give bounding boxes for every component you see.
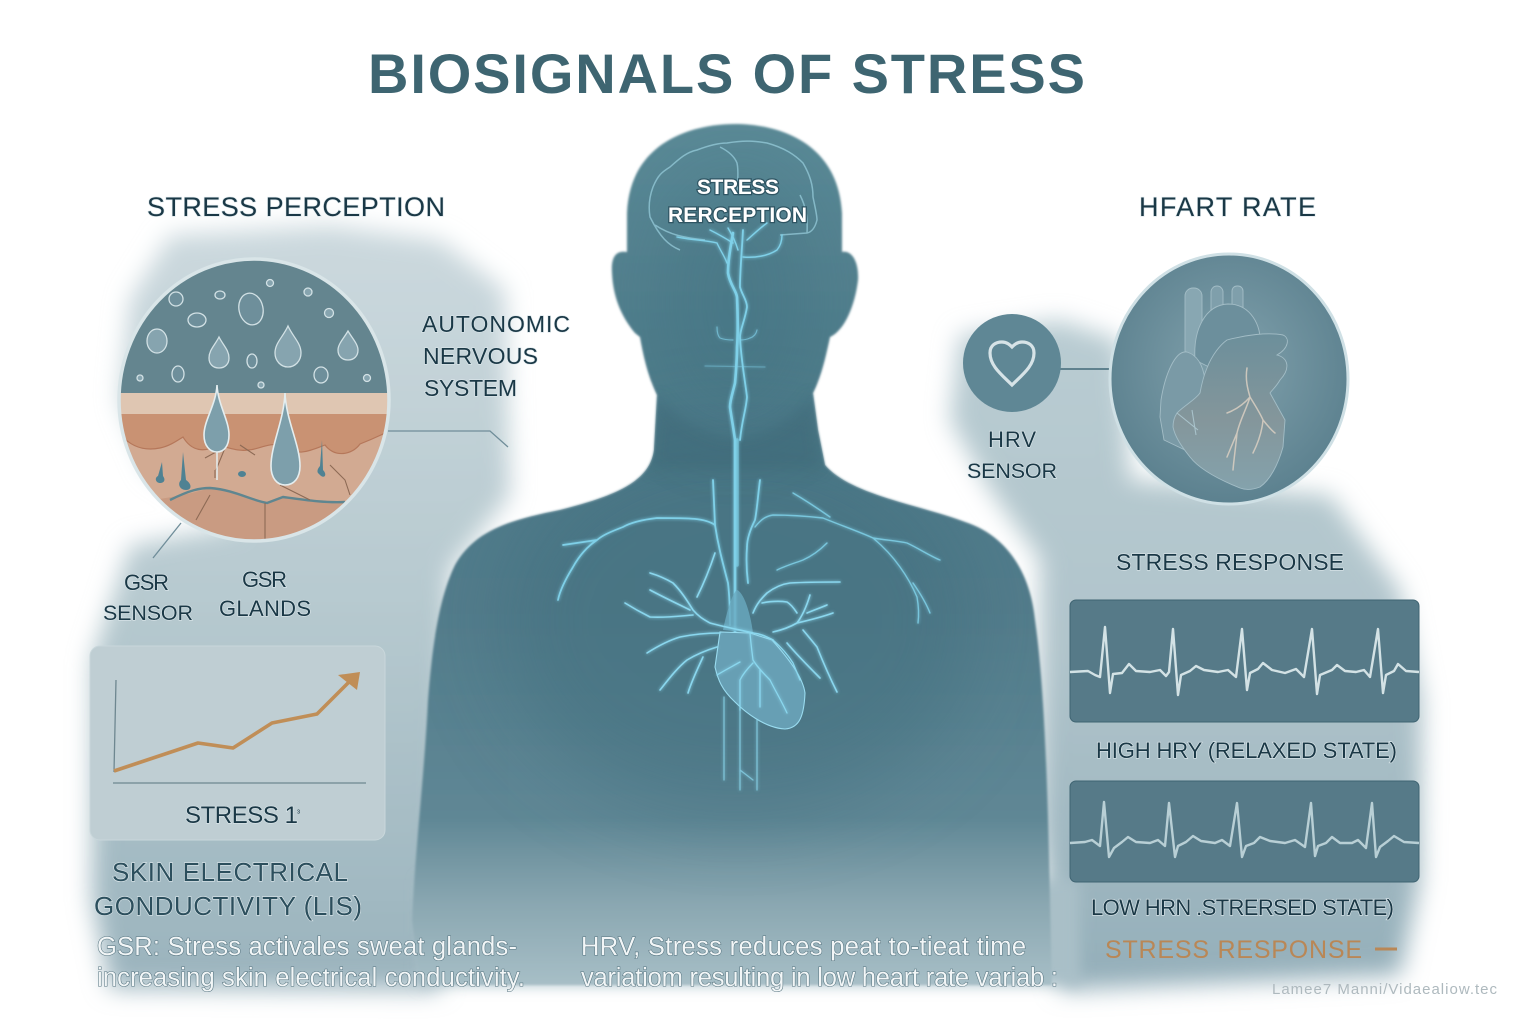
panel: conductivity chart xyxy=(90,646,385,840)
label: gsr sensor: SENSOR xyxy=(103,601,193,625)
skin illustration xyxy=(120,260,388,540)
label: autonomic nervous system xyxy=(422,311,570,401)
heading: stress response: STRESS RESPONSE xyxy=(1116,549,1344,575)
label: low hrv: LOW HRN .STRERSED STATE) xyxy=(1091,895,1394,920)
arrowhead xyxy=(338,672,360,690)
arrow: stress response dash xyxy=(1375,948,1397,950)
label: gsr glands xyxy=(219,567,311,621)
label: autonomic nervous system: AUTONOMIC xyxy=(422,311,570,337)
background panel: right xyxy=(950,320,1422,990)
text block: gsr explanation xyxy=(97,933,525,992)
human figure xyxy=(412,124,1052,985)
brain outline xyxy=(649,141,817,250)
figure caption: stress reception: STRESS xyxy=(697,176,779,199)
panel: skin circle xyxy=(117,258,391,543)
rising line xyxy=(114,679,352,771)
water drops xyxy=(137,280,370,388)
heading: skin electrical conductivity xyxy=(94,857,362,921)
sweat gland drops xyxy=(204,385,300,485)
label: hrv sensor: HRV xyxy=(988,427,1036,452)
connector: sensor to heart xyxy=(1060,368,1110,370)
aortic root xyxy=(723,590,753,633)
footer credit: Lamee7 Manni/Vidaealiow.tec xyxy=(1272,981,1498,998)
heading: skin electrical conductivity: SKIN ELECTRICAL xyxy=(112,857,348,887)
icon: hrv sensor heart xyxy=(963,314,1061,412)
panel: heart circle xyxy=(1110,254,1348,504)
text block: gsr explanation: increasing skin electrical conductivity. xyxy=(97,964,525,992)
text block: hrv explanation xyxy=(581,933,1058,992)
axes xyxy=(113,680,366,783)
background band: bottom xyxy=(420,880,1080,985)
chart card xyxy=(90,646,385,840)
panel: low hrv ecg xyxy=(1070,781,1419,882)
label: gsr sensor xyxy=(103,570,193,625)
label: high hrv: HIGH HRY (RELAXED STATE) xyxy=(1096,738,1397,763)
title: BIOSIGNALS OF STRESS xyxy=(368,42,1085,105)
body silhouette xyxy=(412,124,1052,985)
label: hrv sensor xyxy=(967,427,1057,483)
heart shape xyxy=(715,632,805,729)
follicles xyxy=(156,440,325,490)
heading: skin electrical conductivity: GONDUCTIVITY (LIS) xyxy=(94,891,362,921)
label: autonomic nervous system: SYSTEM xyxy=(424,375,517,401)
circle border xyxy=(119,259,389,541)
leader line: gsr sensor xyxy=(153,523,181,558)
superscript: ³ xyxy=(297,808,300,818)
nerves: head and spine xyxy=(558,223,940,660)
text block: gsr explanation: GSR: Stress activales sweat glands- xyxy=(97,933,517,961)
figure caption: stress reception: RERCEPTION xyxy=(668,204,807,227)
heading: stress perception: STRESS PERCEPTION xyxy=(147,192,445,222)
text block: hrv explanation: variatiom resulting in low heart rate variab : xyxy=(581,964,1058,992)
label: autonomic nervous system: NERVOUS xyxy=(423,343,538,369)
body inner shading xyxy=(498,170,978,810)
label: gsr sensor: GSR xyxy=(124,570,169,595)
label: hrv sensor: SENSOR xyxy=(967,459,1057,483)
label: stress response accent: STRESS RESPONSE xyxy=(1105,936,1362,964)
leader line: autonomic nervous system xyxy=(388,431,508,447)
panel: high hrv ecg xyxy=(1070,600,1419,722)
anatomical heart xyxy=(1160,286,1287,489)
heart in chest xyxy=(625,553,840,790)
ecg trace low xyxy=(1070,802,1419,857)
label: gsr glands: GLANDS xyxy=(219,596,311,621)
text block: hrv explanation: HRV, Stress reduces peat to-tieat time xyxy=(581,933,1026,961)
figure caption: stress reception xyxy=(668,176,807,227)
heading: heart rate: HFART RATE xyxy=(1139,192,1316,222)
label: gsr glands: GSR xyxy=(242,567,287,592)
background panel: left xyxy=(92,225,510,990)
heart branches xyxy=(625,553,840,790)
heart vessels xyxy=(1227,368,1275,470)
ecg trace high xyxy=(1070,627,1419,695)
chart label: STRESS 1 xyxy=(185,802,298,829)
